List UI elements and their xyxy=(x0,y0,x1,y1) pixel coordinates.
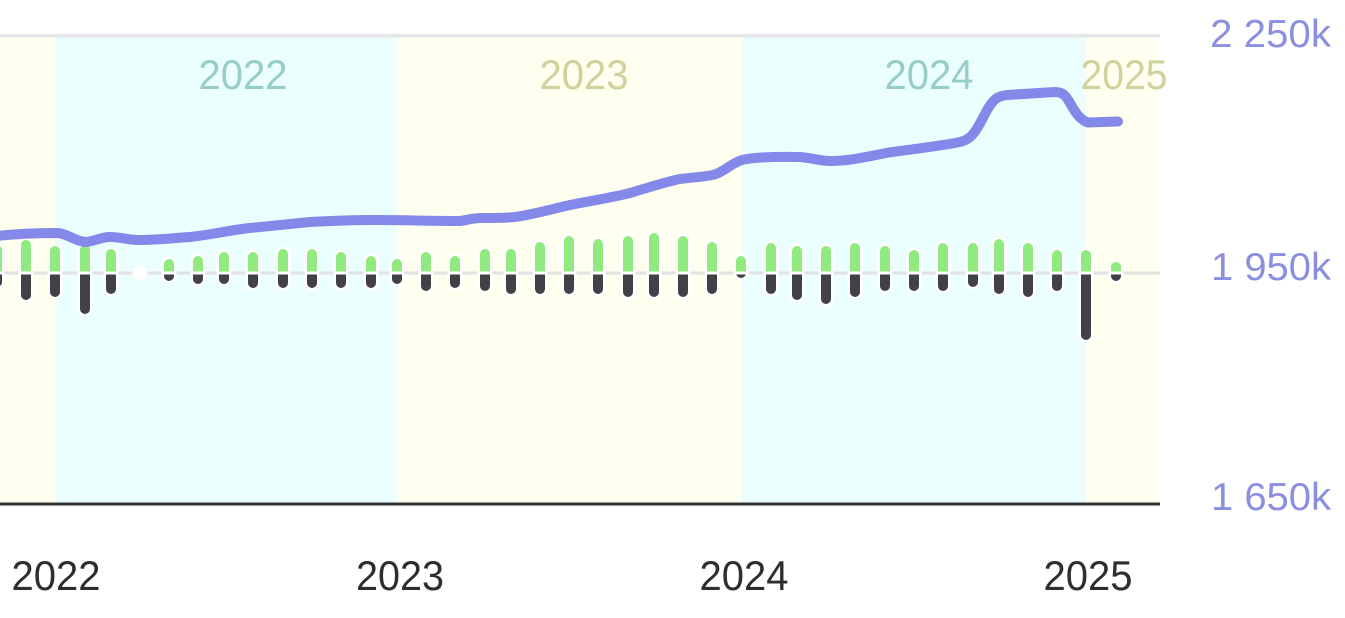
year bands xyxy=(0,37,1158,503)
x axis labels xyxy=(12,552,1132,599)
x axis labels: 2023 xyxy=(356,552,444,599)
balance line xyxy=(0,92,1118,242)
inflow bars (green) xyxy=(0,233,1121,272)
year band labels xyxy=(198,51,1168,98)
year band labels: 2024 xyxy=(884,51,974,98)
year band labels: 2025 xyxy=(1080,51,1168,98)
year band labels: 2022 xyxy=(198,51,288,98)
outflow bars (dark) xyxy=(0,274,1121,340)
year band labels: 2023 xyxy=(540,51,628,98)
right axis labels xyxy=(1210,13,1332,519)
right axis labels: 1 950k xyxy=(1211,246,1331,289)
right axis labels: 2 250k xyxy=(1210,13,1332,56)
x axis labels: 2025 xyxy=(1044,552,1132,599)
x axis labels: 2024 xyxy=(700,552,788,599)
bar halos xyxy=(0,238,1116,335)
right axis labels: 1 650k xyxy=(1211,476,1331,519)
x axis labels: 2022 xyxy=(12,552,100,599)
axis baseline xyxy=(0,502,1160,506)
